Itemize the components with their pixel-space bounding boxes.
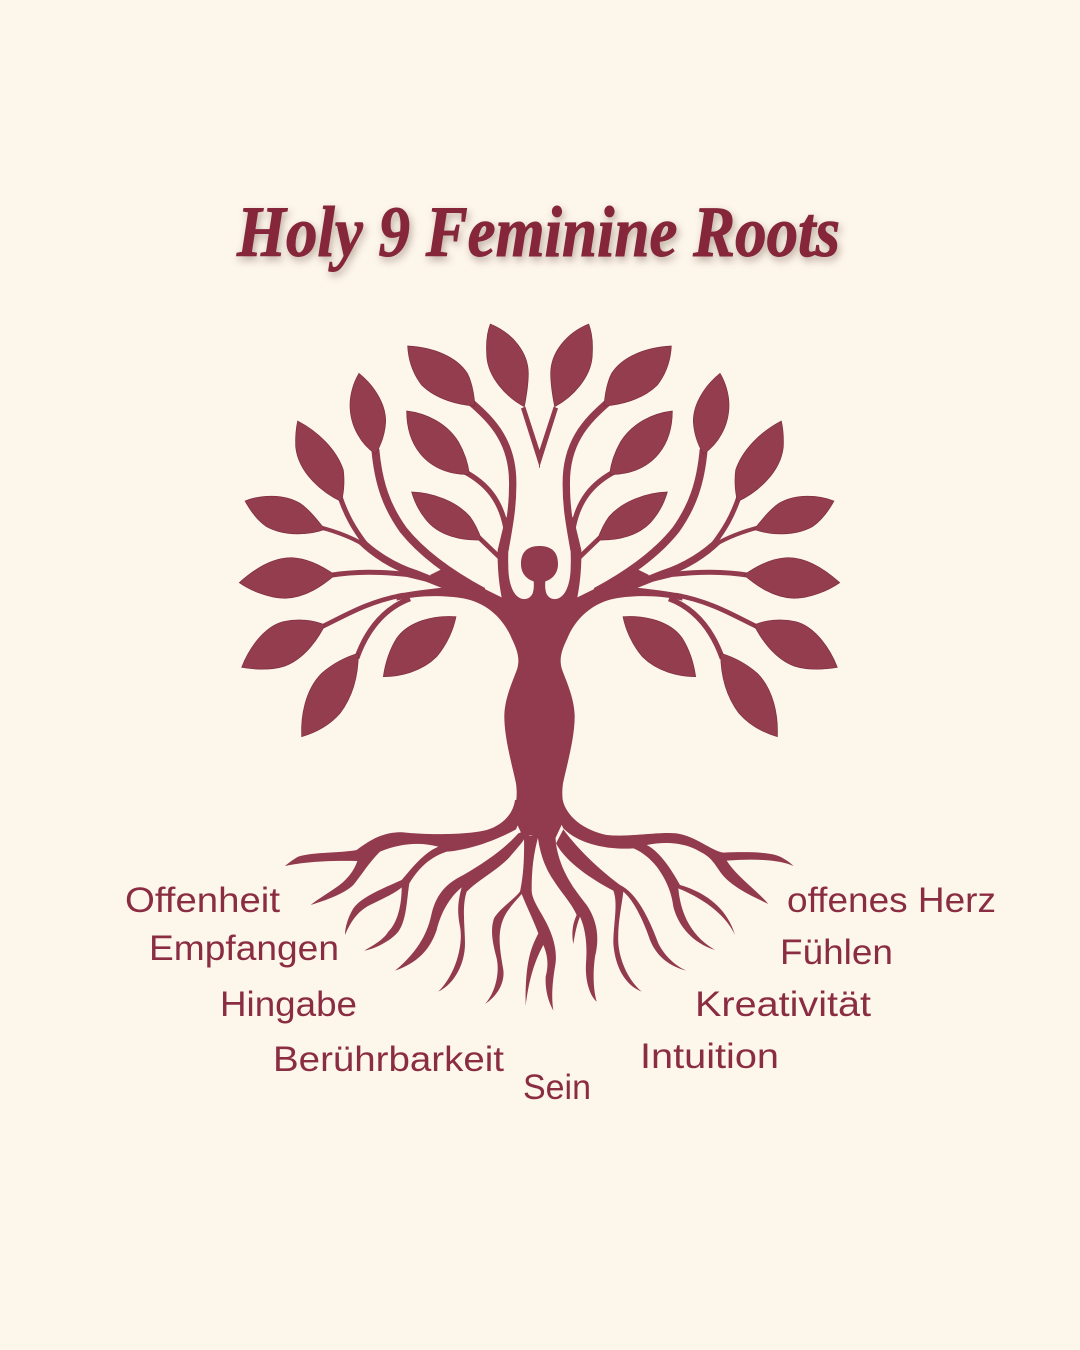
title: Holy 9 Feminine Roots <box>236 192 840 272</box>
label: Berührbarkeit: Berührbarkeit <box>273 1040 504 1079</box>
crown and body: left half <box>239 324 542 839</box>
label: Empfangen: Empfangen <box>149 929 339 968</box>
label: Sein: Sein <box>523 1068 591 1107</box>
label: Fühlen: Fühlen <box>780 933 893 972</box>
label: Kreativität: Kreativität <box>695 985 871 1024</box>
label: Intuition: Intuition <box>640 1037 779 1076</box>
label: Offenheit: Offenheit <box>125 881 280 920</box>
tree figure <box>239 324 840 1011</box>
leaves: left <box>239 324 528 737</box>
roots: centre <box>485 834 556 1011</box>
label: offenes Herz: offenes Herz <box>787 881 996 920</box>
body and head: left <box>397 510 542 839</box>
crown and body: right half (mirror) <box>537 324 840 839</box>
roots: left side <box>285 800 528 992</box>
branches: left <box>320 402 540 658</box>
label: Hingabe: Hingabe <box>220 985 357 1024</box>
roots: right side <box>537 800 793 1002</box>
